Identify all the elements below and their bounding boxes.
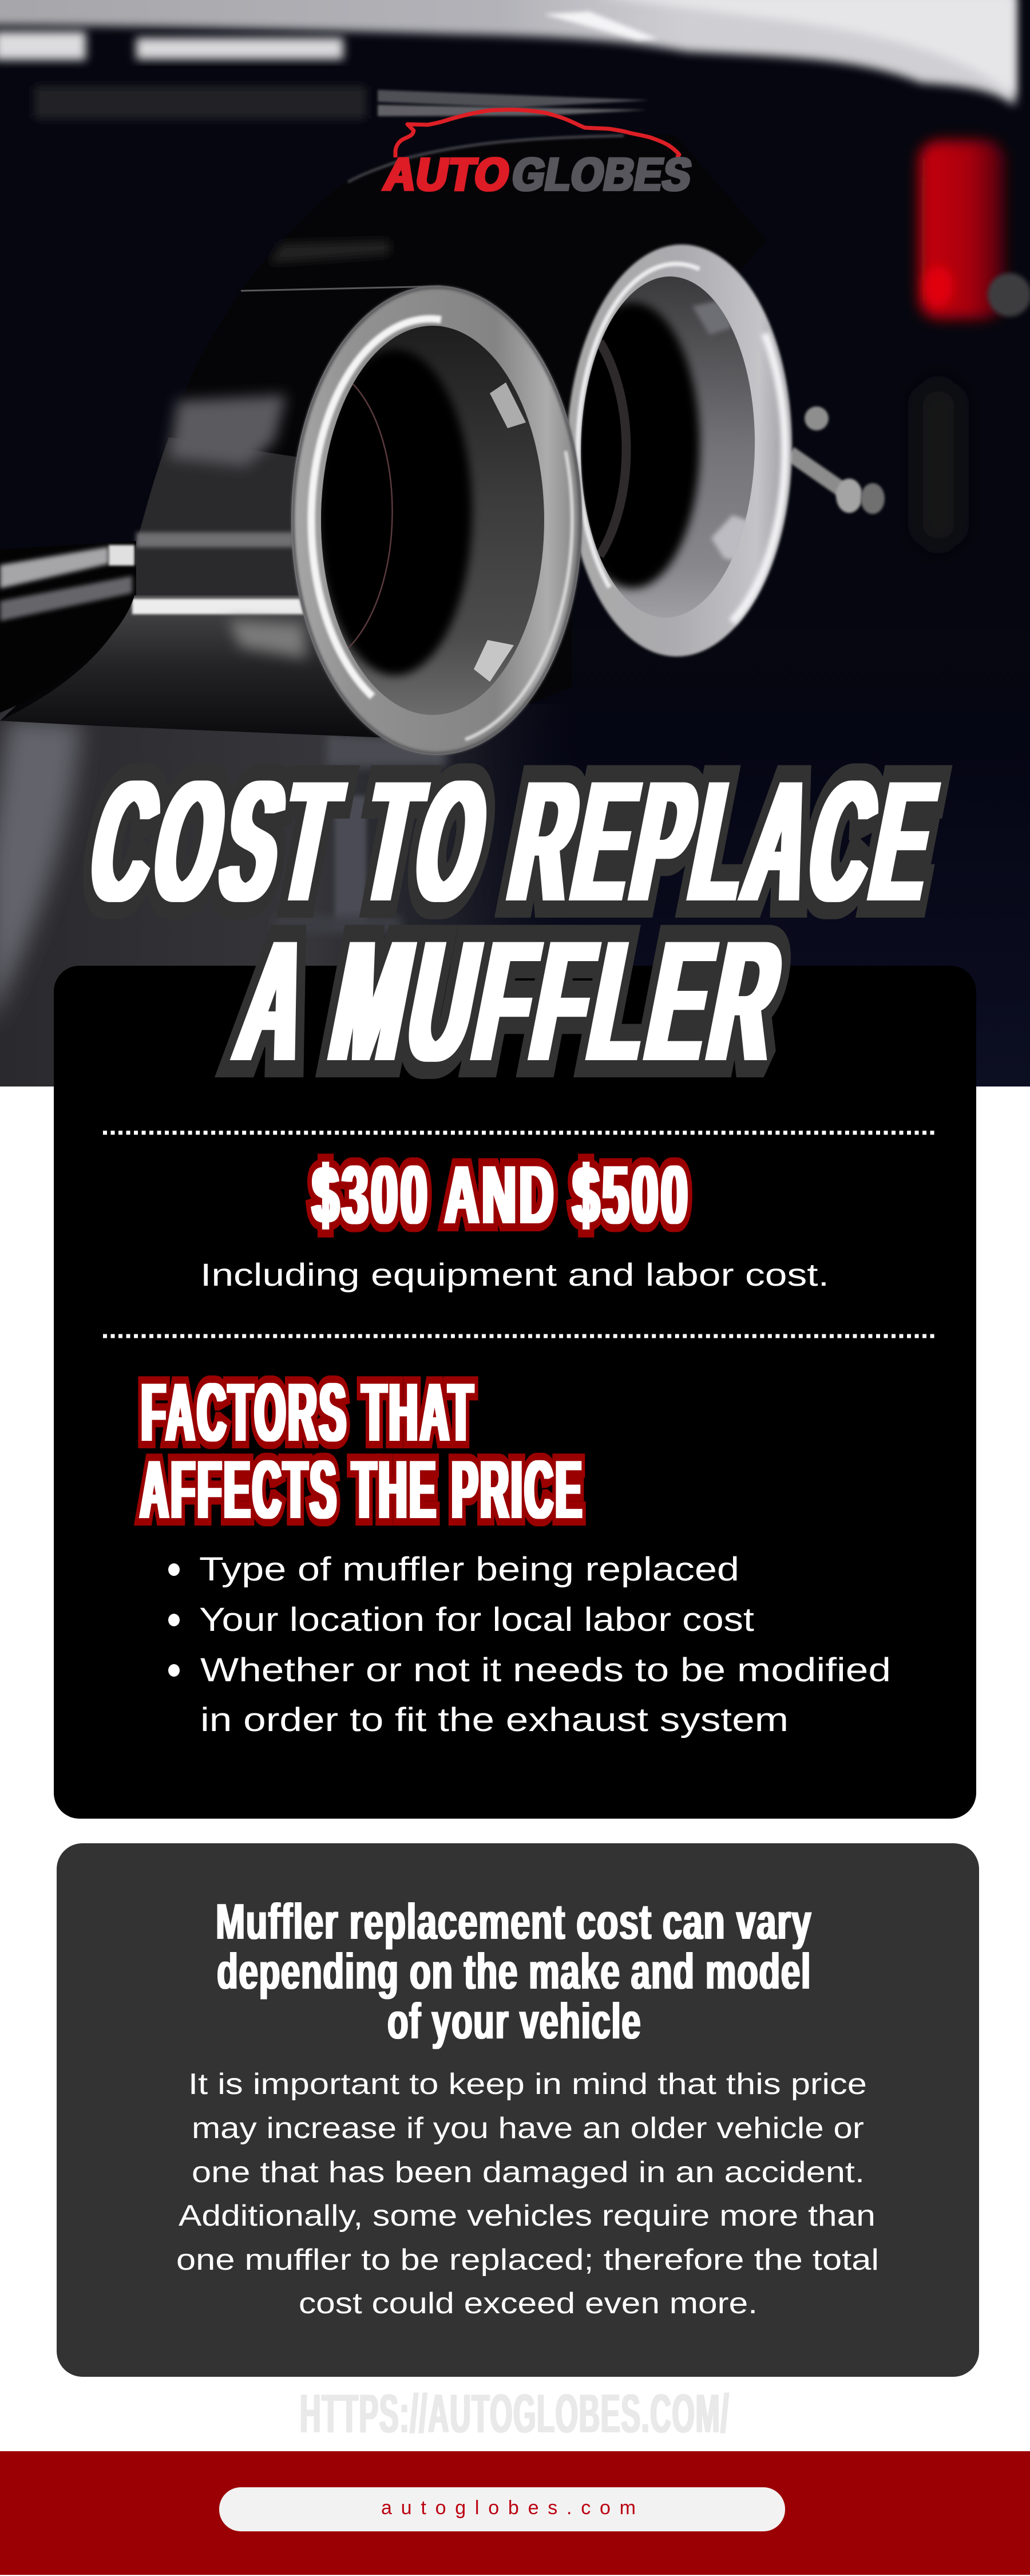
photo: exhaust tips	[0, 0, 1030, 1086]
title	[77, 746, 955, 1097]
lower right background	[521, 818, 1030, 1086]
white pipe highlight	[0, 595, 381, 737]
factors list: in order to fit the exhaust system	[200, 1701, 789, 1739]
factors heading	[140, 1366, 584, 1536]
front exhaust ring	[291, 286, 582, 755]
panel body text: one that has been damaged in an accident.	[192, 2156, 865, 2189]
price range: $300 AND $500	[312, 1148, 691, 1241]
panel: make and model note	[57, 1843, 979, 2377]
bumper reflections	[0, 31, 343, 60]
factors list: Whether or not it needs to be modified	[200, 1652, 891, 1689]
factors heading: FACTORS THAT	[141, 1366, 476, 1459]
footer band	[0, 2451, 1030, 2575]
tab upper	[490, 382, 526, 428]
panel body text	[176, 2068, 879, 2320]
panel body text: one muffler to be replaced; therefore the total	[176, 2243, 879, 2277]
rear exhaust ring	[563, 243, 795, 658]
body mid shading	[136, 437, 306, 598]
panel heading: of your vehicle	[387, 1993, 641, 2049]
factors list	[168, 1551, 891, 1739]
logo: AutoGlobes	[381, 110, 696, 200]
faint background shapes	[923, 392, 954, 538]
tab lower	[474, 640, 514, 682]
panel body text: Additionally, some vehicles require more than	[179, 2199, 876, 2233]
price note: Including equipment and labor cost.	[200, 1257, 829, 1293]
far-left dark lobe with streaks	[0, 541, 136, 713]
factors list: Type of muffler being replaced	[199, 1551, 739, 1588]
panel heading	[216, 1893, 812, 2049]
footer pill	[219, 2487, 785, 2531]
logo wordmark AUTO: AUTO	[381, 149, 514, 200]
panel: price and factors	[54, 966, 976, 1819]
footer domain: autoglobes.com	[381, 2497, 636, 2519]
reflection streaks	[34, 86, 650, 119]
panel body text: may increase if you have an older vehicle or	[192, 2112, 864, 2145]
lower left background	[0, 704, 572, 1086]
tail light	[919, 140, 1030, 319]
logo wordmark GLOBES: GLOBES	[509, 149, 696, 200]
panel body text: cost could exceed even more.	[299, 2287, 758, 2320]
bumper	[0, 0, 1015, 106]
muffler body	[0, 135, 767, 740]
panel body text: It is important to keep in mind that this price	[188, 2068, 867, 2101]
rear bolts and rod	[790, 406, 885, 514]
factors list: Your location for local labor cost	[199, 1601, 754, 1638]
